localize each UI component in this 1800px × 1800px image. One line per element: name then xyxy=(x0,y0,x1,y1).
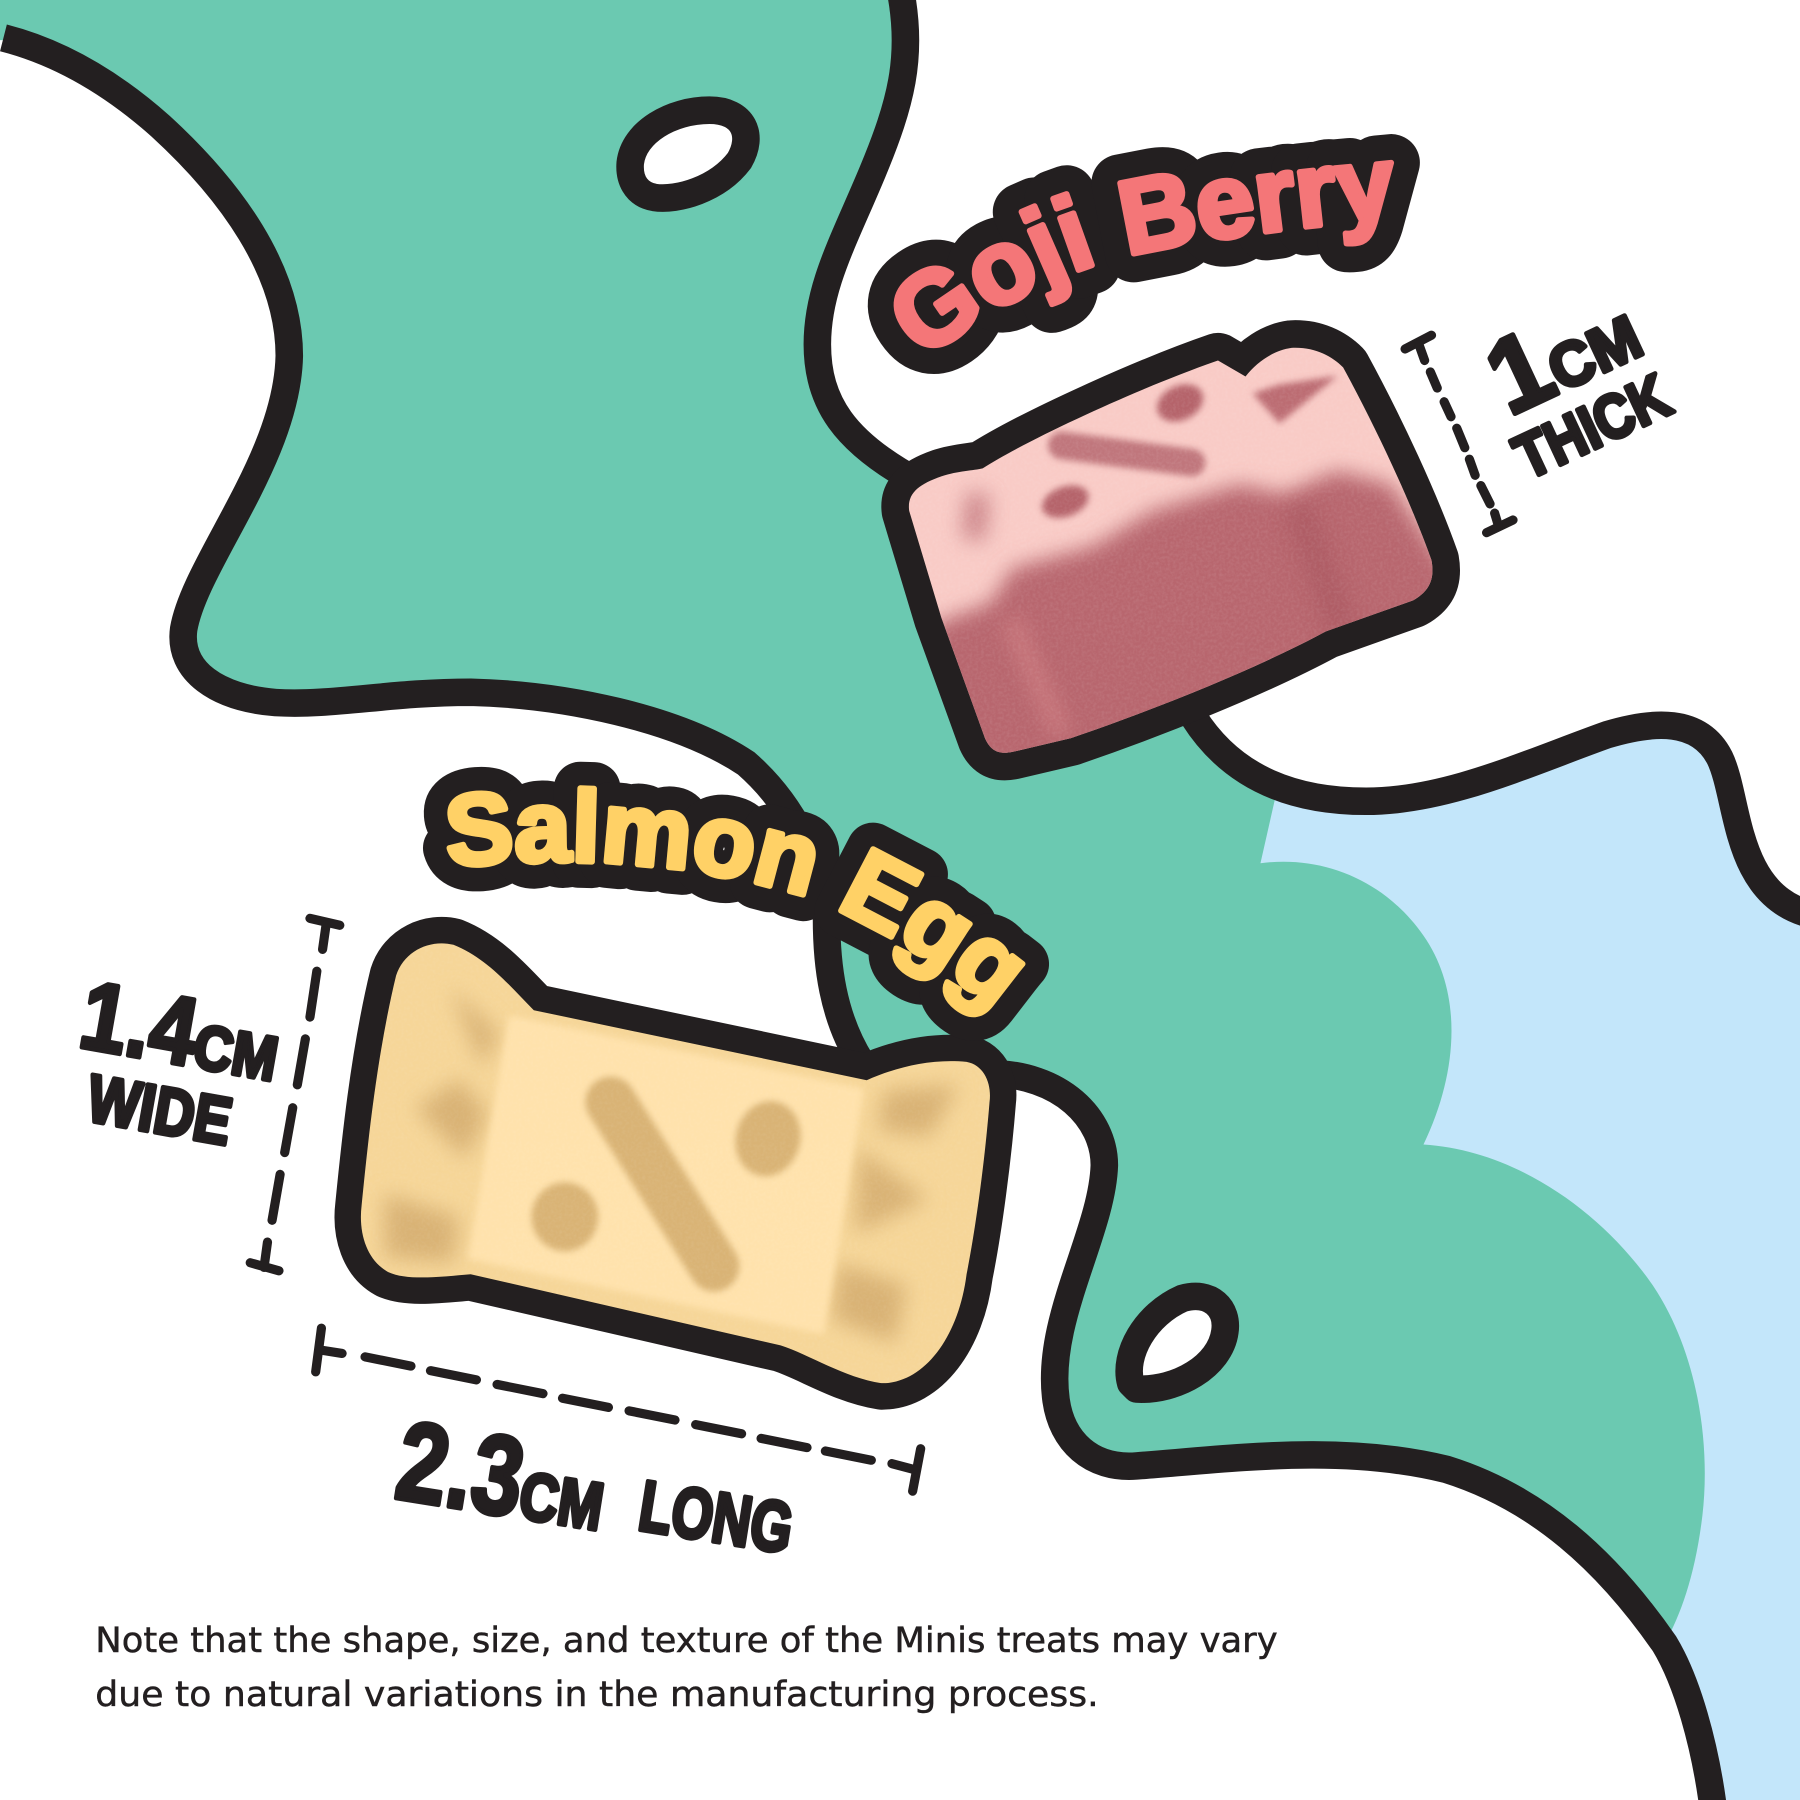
outline: lower curve to bottom xyxy=(987,1073,1713,1800)
label: 1cm thick: THICK xyxy=(1504,361,1681,493)
dimension line: thickness xyxy=(1405,335,1513,533)
ring hole: upper xyxy=(630,110,746,198)
note text: Note that the shape, size, and texture of the Minis treats may vary xyxy=(95,1621,1278,1661)
ring hole: lower xyxy=(1129,1296,1225,1389)
label: 2.3cm long: 2.3CM xyxy=(389,1397,615,1554)
label: 2.3cm long xyxy=(389,1397,803,1584)
title: Goji Berry: Goji Berry xyxy=(894,160,1394,348)
label: 1.4cm wide xyxy=(61,962,288,1166)
light blue shape xyxy=(1194,717,1800,1800)
goji berry treat xyxy=(895,333,1458,781)
label: 2.3cm long: LONG xyxy=(634,1467,798,1569)
label: 1.4cm wide: WIDE xyxy=(82,1062,237,1160)
label: 1.4cm wide: 1.4CM xyxy=(73,962,288,1102)
salmon egg treat xyxy=(344,930,1010,1401)
title: Salmon Egg: Salmon Egg xyxy=(422,762,1049,1040)
title: Salmon Egg: Salmon Egg xyxy=(446,785,1026,1018)
note text: due to natural variations in the manufacturing process. xyxy=(95,1675,1099,1715)
outline: top curve to goji treat xyxy=(817,0,918,482)
dimension line: length xyxy=(316,1328,921,1491)
note text xyxy=(95,1621,1278,1715)
dimension line: width xyxy=(250,918,340,1271)
title: Goji Berry: Goji Berry xyxy=(868,134,1420,374)
outline: left curve of teal shape xyxy=(3,38,861,1062)
outline: wave to right edge xyxy=(1194,717,1800,913)
label: 1cm thick xyxy=(1459,266,1681,493)
label: 1cm thick: 1CM xyxy=(1469,266,1656,437)
